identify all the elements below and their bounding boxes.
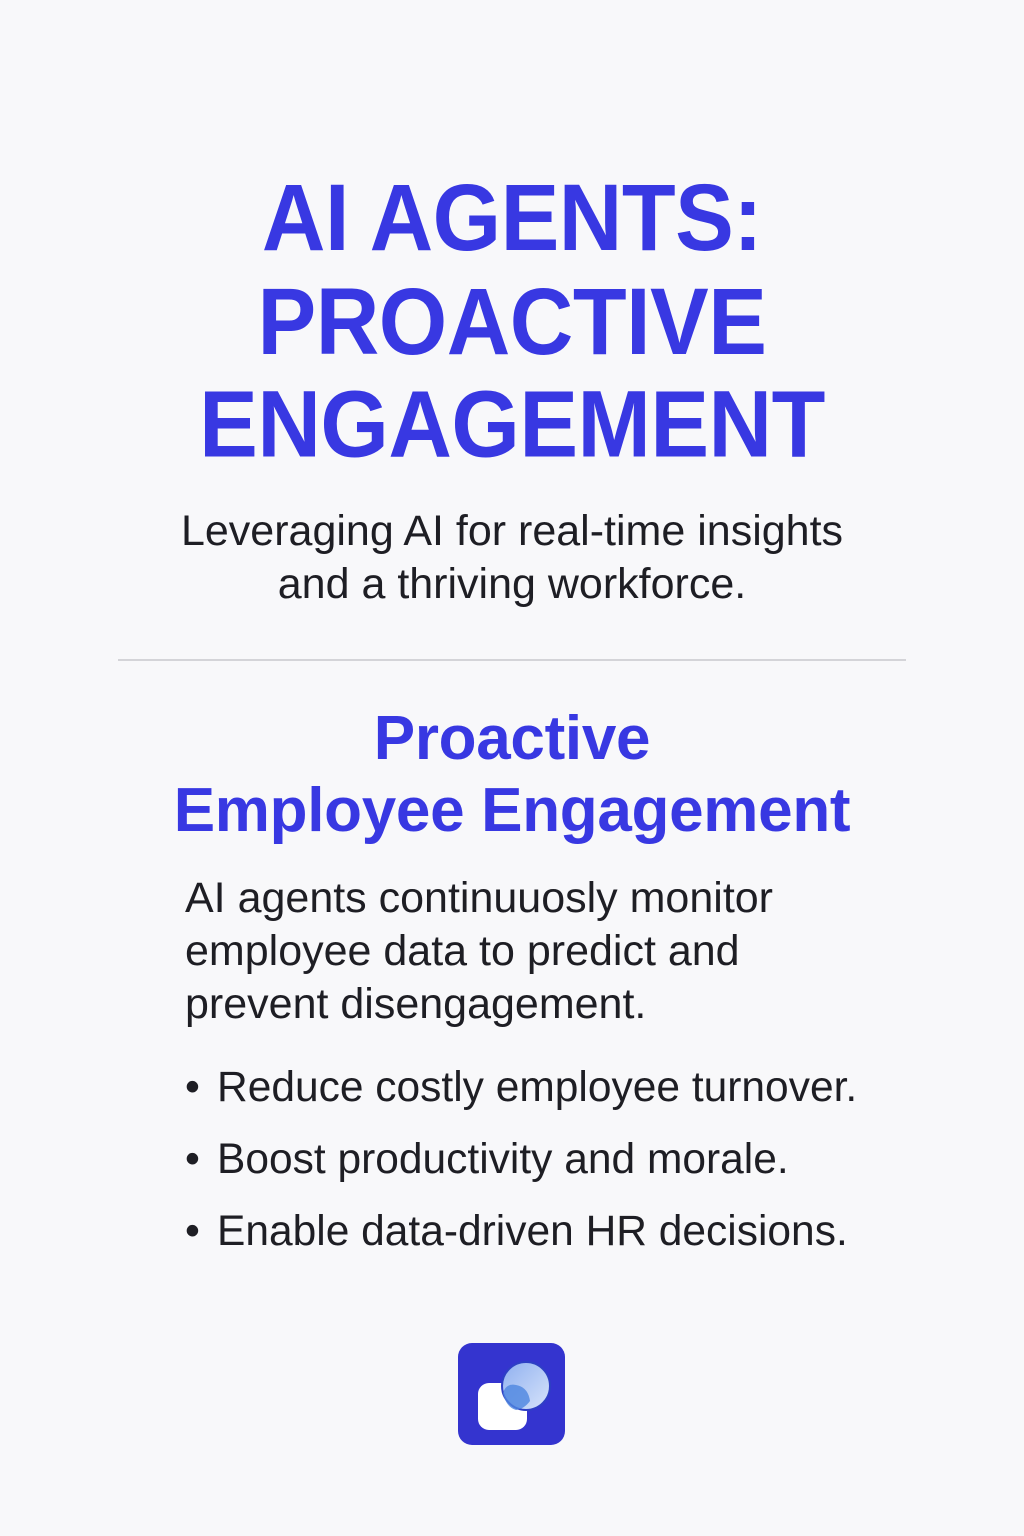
title bbox=[199, 164, 825, 477]
benefits list: • bbox=[185, 1064, 200, 1111]
benefits list: Boost productivity and morale. bbox=[217, 1136, 789, 1183]
subtitle bbox=[181, 507, 843, 608]
icon: chat bubbles logo bbox=[458, 1343, 565, 1445]
title: PROACTIVE bbox=[258, 267, 766, 374]
section heading: Employee Engagement bbox=[174, 776, 850, 845]
benefits list: • bbox=[185, 1208, 200, 1255]
subtitle: Leveraging AI for real-time insights bbox=[181, 507, 843, 555]
description text bbox=[185, 874, 773, 1028]
section heading: Proactive bbox=[374, 704, 650, 773]
benefits list: Reduce costly employee turnover. bbox=[217, 1064, 857, 1111]
description text: employee data to predict and bbox=[185, 927, 740, 975]
subtitle: and a thriving workforce. bbox=[278, 560, 746, 608]
description text: AI agents continuuosly monitor bbox=[185, 874, 773, 922]
title: ENGAGEMENT bbox=[199, 370, 825, 477]
title: AI AGENTS: bbox=[262, 164, 762, 271]
description text: prevent disengagement. bbox=[185, 980, 646, 1028]
benefits list bbox=[185, 1064, 857, 1255]
benefits list: • bbox=[185, 1136, 200, 1183]
benefits list: Enable data-driven HR decisions. bbox=[217, 1208, 848, 1255]
section heading bbox=[174, 704, 850, 845]
